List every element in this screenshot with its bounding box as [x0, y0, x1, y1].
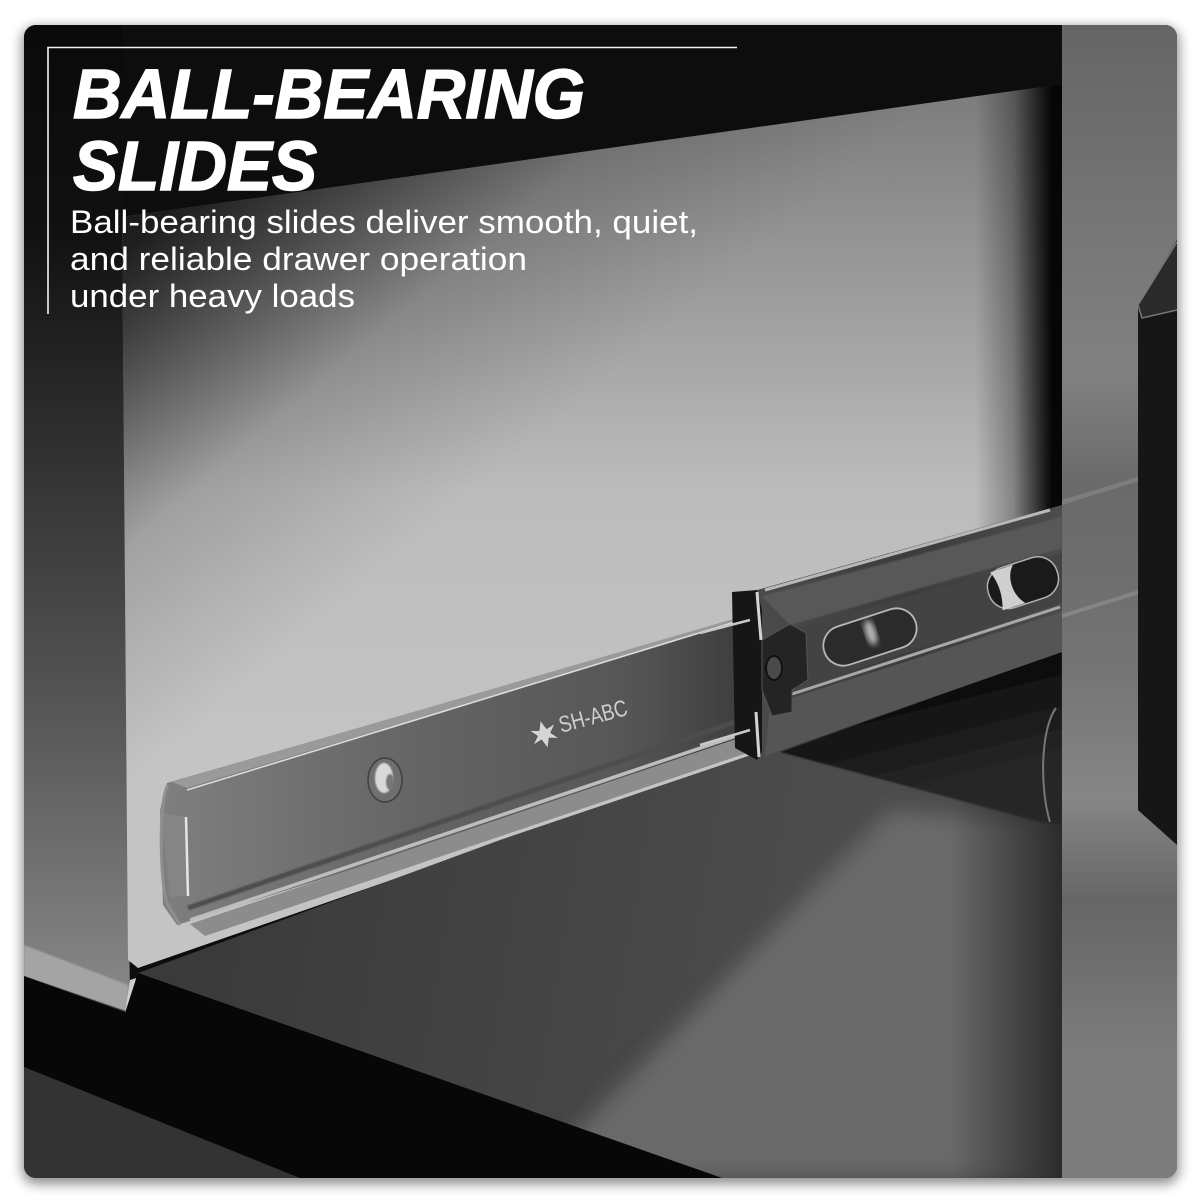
drawer side face: [24, 25, 130, 1012]
rail body: [757, 505, 1062, 757]
rivet: [368, 758, 402, 802]
lower groove: [188, 722, 735, 908]
rail end cap: [181, 817, 186, 896]
description text: under heavy loads: [70, 278, 355, 314]
embossed logo: SH-ABC: [556, 694, 630, 738]
black handle: [1138, 240, 1177, 845]
long slot: [822, 607, 918, 667]
title: BALL-BEARING: [73, 55, 585, 133]
right cabinet column: [1062, 25, 1177, 1178]
embossed logo: [530, 700, 628, 748]
round slot: [986, 556, 1060, 610]
plastic clip: [762, 624, 808, 716]
handle bevel: [1138, 242, 1177, 318]
lower grey area: [24, 1067, 300, 1178]
title: [73, 55, 585, 205]
side face bottom fold: [24, 945, 128, 1012]
lower flange highlight: [792, 607, 1060, 694]
upper flange sheen: [172, 615, 748, 788]
rail end outline: [161, 785, 180, 925]
lower flange: [190, 736, 750, 936]
floor of the cabinet: [130, 640, 1070, 1180]
knob behind column: [1043, 708, 1056, 822]
lower flange: [765, 612, 1062, 756]
upper flange highlight: [765, 510, 1050, 590]
clip hole: [766, 656, 782, 680]
rail end highlight: [186, 817, 188, 896]
drawer front panel: [122, 84, 1062, 968]
end plate highlight: [756, 592, 761, 757]
description text: Ball-bearing slides deliver smooth, quiet,: [70, 204, 698, 240]
title: SLIDES: [73, 127, 317, 205]
black channel under drawer: [24, 973, 722, 1178]
description text: and reliable drawer operation: [70, 241, 527, 277]
rail body: [160, 620, 745, 925]
description text: [70, 204, 698, 314]
lower bright edge: [190, 733, 745, 920]
inner rail wires: [700, 620, 750, 745]
rail end plate: [732, 590, 762, 760]
shadow under rail: [780, 650, 1062, 825]
outer slide rail: [700, 505, 1064, 760]
inner slide rail: [160, 615, 750, 936]
upper flange shade: [762, 517, 1062, 625]
upper bright edge: [187, 618, 748, 790]
panel lip: [125, 978, 136, 1013]
mid channel: [1044, 553, 1062, 608]
corner frame line: [48, 48, 737, 314]
